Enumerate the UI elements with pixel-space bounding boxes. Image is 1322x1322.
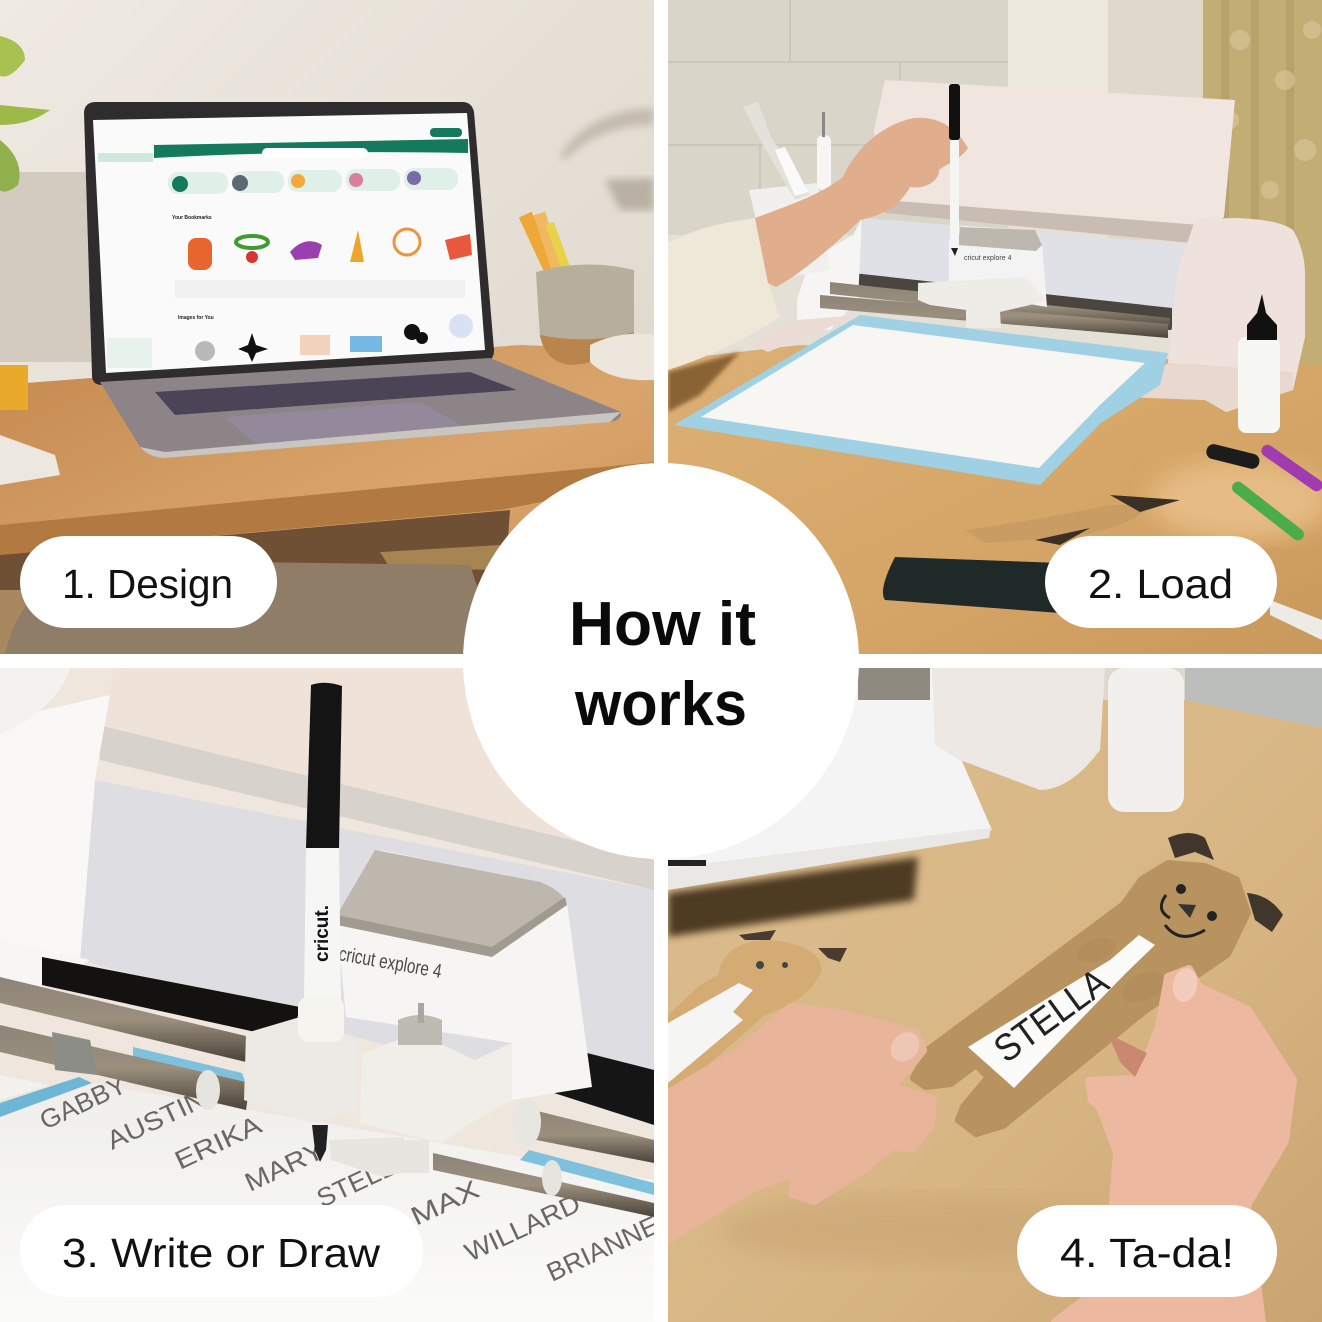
paper with names: GABBY [35, 1069, 131, 1135]
label: 1. Design [20, 536, 277, 628]
label: 3. Write or Draw [20, 1205, 423, 1297]
label: 4. Ta-da! [1017, 1205, 1277, 1297]
paper with names: MAX [406, 1174, 484, 1231]
small dog bookmark [668, 930, 847, 1100]
label: 2. Load [1045, 536, 1277, 628]
center circle: works [574, 670, 747, 739]
paper with names: WILLARD [460, 1188, 585, 1267]
dog bookmark STELLA [914, 833, 1283, 1133]
phone [883, 557, 1060, 613]
shadow under tray [668, 857, 918, 937]
icon: pen pot [519, 212, 654, 380]
panel: step 2 load photo [668, 0, 1322, 654]
curtain [1203, 0, 1322, 400]
glue bottle [1238, 294, 1280, 433]
carriage [244, 850, 592, 1177]
icon: books [0, 365, 60, 485]
paper with names: ERIKA [170, 1109, 267, 1175]
pen [949, 84, 960, 256]
paper with names: STELLA [312, 1144, 416, 1213]
paper with names: AUSTIN [102, 1083, 211, 1155]
center circle [463, 463, 859, 859]
label: 3. Write or Draw: 3. Write or Draw [62, 1230, 380, 1276]
label: 2. Load: 2. Load [1088, 561, 1233, 607]
paper with names [0, 1047, 663, 1322]
label: 1. Design: 1. Design [62, 561, 233, 607]
tool pot [743, 102, 831, 280]
hand and arm [668, 118, 968, 370]
heading: How it [569, 590, 756, 659]
paper dog bookmark [965, 495, 1180, 545]
panel: step 4 ta-da photo [668, 668, 1322, 1322]
panel: step 1 design photo [0, 0, 654, 654]
rails [0, 977, 654, 1217]
laptop: Images for You [178, 315, 214, 321]
paper with names: MARY [240, 1135, 329, 1197]
label: 4. Ta-da!: 4. Ta-da! [1060, 1230, 1234, 1276]
carriage: cricut explore 4 [337, 943, 443, 983]
markers [1205, 442, 1322, 543]
cutting mat [674, 315, 1168, 485]
laptop [84, 102, 621, 458]
cutting machine [753, 80, 1305, 412]
cutting machine: cricut explore 4 [964, 255, 1012, 262]
panel: step 3 write or draw photo [0, 668, 663, 1322]
pen [298, 683, 344, 1042]
hands [668, 966, 1293, 1322]
laptop: Your Bookmarks [172, 215, 212, 221]
paper with names: BRIANNE [542, 1210, 663, 1287]
pen: cricut. [312, 905, 333, 962]
icon: plant leaves [0, 36, 50, 192]
blurred machine [668, 668, 1184, 890]
dog bookmark STELLA: STELLA [987, 961, 1117, 1071]
